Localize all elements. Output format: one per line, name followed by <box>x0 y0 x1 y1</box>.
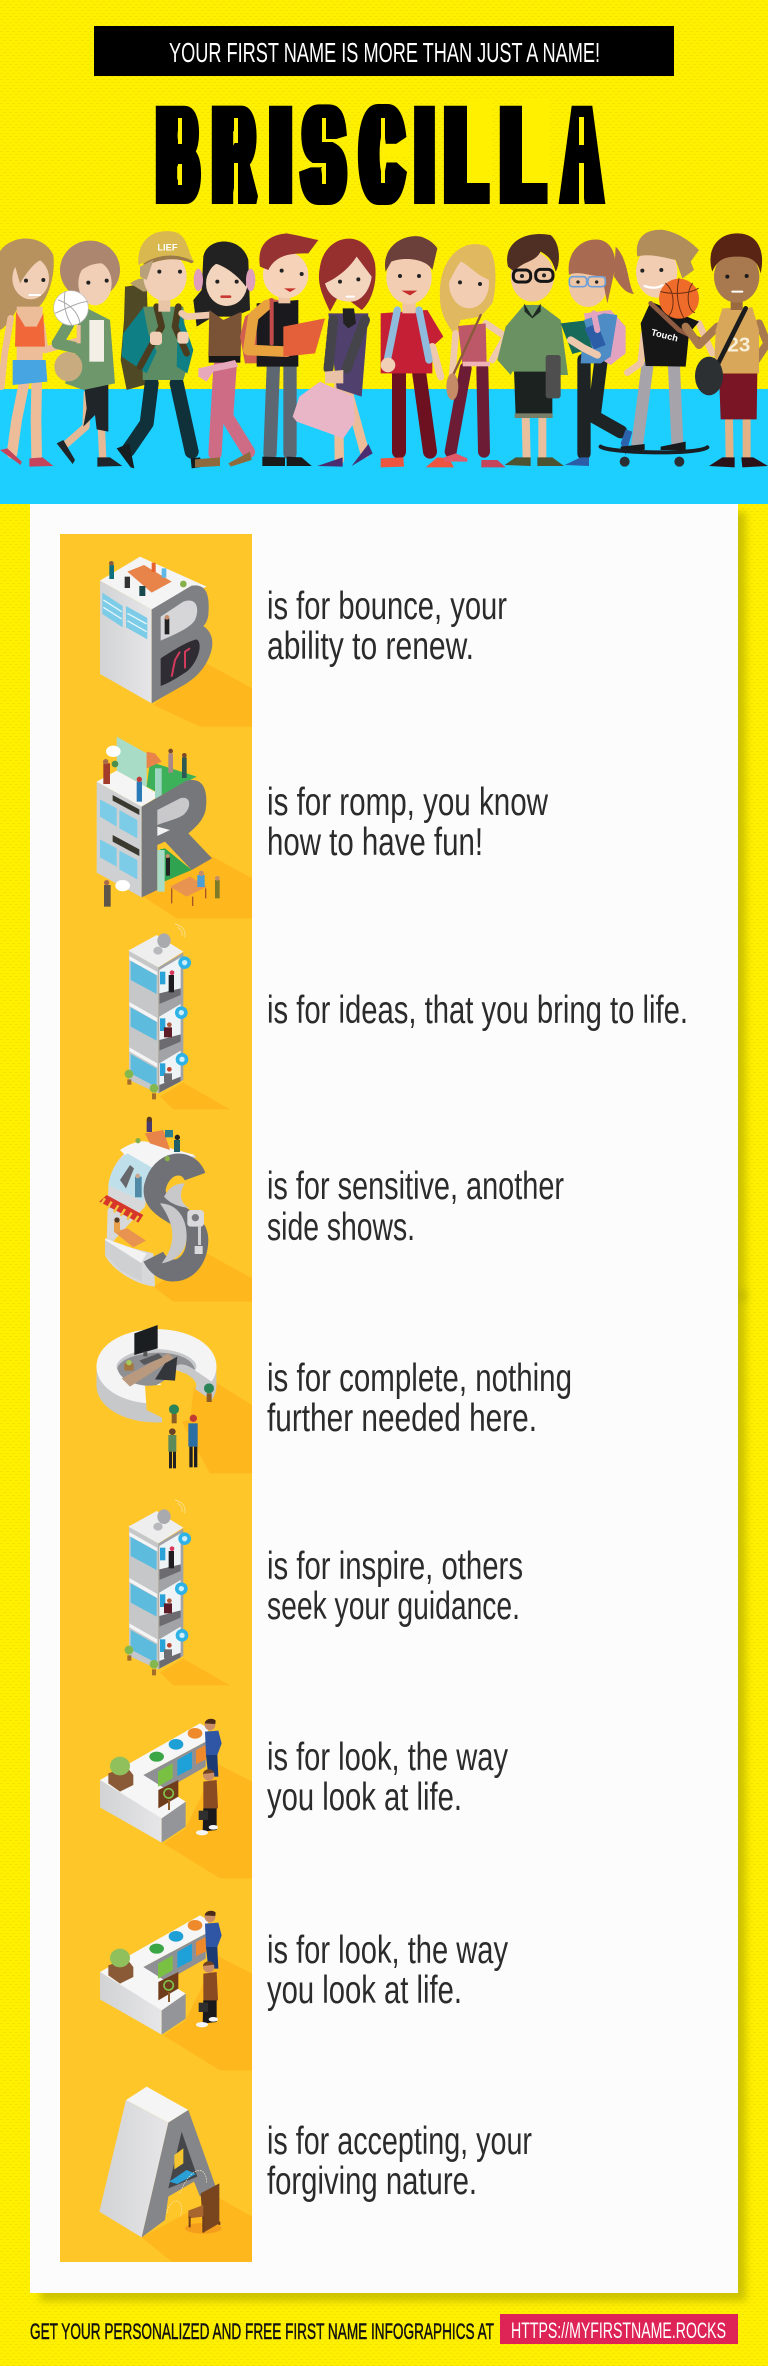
person 6 <box>293 239 376 467</box>
icon: letter B building <box>100 557 252 727</box>
footer call to action: GET YOUR PERSONALIZED AND FREE FIRST NAME INFOGRAPHICS AT <box>30 2319 494 2344</box>
text: A: is for accepting, your <box>267 2120 532 2163</box>
person 1 <box>0 239 78 467</box>
text: S <box>267 1165 564 1249</box>
text: B <box>267 585 507 668</box>
icon: letter L recycling counter <box>100 1719 252 1878</box>
text: B: is for bounce, your <box>267 585 507 628</box>
white content panel <box>30 504 746 2301</box>
person 11 <box>601 230 712 467</box>
orange illustration column <box>60 534 252 2262</box>
text: C <box>267 1357 572 1440</box>
title: C <box>363 84 401 227</box>
person 7 <box>381 236 454 467</box>
title: I <box>418 84 431 227</box>
top banner <box>94 26 674 76</box>
title: I <box>272 84 289 227</box>
person 12 <box>686 233 768 467</box>
person 3 <box>117 231 203 468</box>
icon: letter I tower (second) <box>125 1500 230 1685</box>
text: S: side shows. <box>267 1206 415 1249</box>
text: C: further needed here. <box>267 1397 537 1440</box>
person 8 <box>440 244 506 467</box>
text: R: is for romp, you know <box>267 781 549 824</box>
text: I second <box>267 1545 523 1628</box>
person 5 <box>240 233 325 466</box>
text: L: you look at life. <box>267 1776 462 1819</box>
icon: letter A building <box>99 2087 252 2262</box>
text: A: forgiving nature. <box>267 2160 477 2203</box>
text: R <box>267 781 549 864</box>
icon: letter L recycling counter (second) <box>100 1911 252 2070</box>
person 12: 23 <box>727 334 750 357</box>
text: I second: is for inspire, others <box>267 1545 523 1588</box>
person 10 <box>561 239 634 466</box>
title: B <box>159 84 196 227</box>
title: L <box>447 84 484 227</box>
title: R <box>215 84 252 227</box>
icon: letter R building <box>97 737 252 918</box>
text: I second: seek your guidance. <box>267 1585 520 1628</box>
text: L second: is for look, the way <box>267 1929 508 1972</box>
icon: letter C reception desk <box>106 1325 252 1473</box>
person 3: LIEF <box>157 243 178 253</box>
person 11: Touch <box>650 327 679 344</box>
group of people, right half <box>381 230 768 467</box>
text: L second <box>267 1929 508 2012</box>
text: B: ability to renew. <box>267 625 474 668</box>
person 4 <box>182 241 255 467</box>
text: S: is for sensitive, another <box>267 1165 564 1208</box>
person 9 <box>497 234 568 466</box>
blue floor band <box>0 389 768 504</box>
text: L second: you look at life. <box>267 1969 462 2012</box>
text: L <box>267 1736 508 1819</box>
text: R: how to have fun! <box>267 821 483 864</box>
title: L <box>503 84 542 227</box>
text: C: is for complete, nothing <box>267 1357 572 1400</box>
person 2 <box>54 241 122 467</box>
group of people, left half <box>0 231 376 468</box>
text: A <box>267 2120 532 2203</box>
text: A <box>565 84 599 227</box>
title <box>159 84 599 227</box>
title: S <box>305 84 342 227</box>
icon: letter I tower <box>125 924 230 1109</box>
icon: letter S building <box>99 1117 252 1302</box>
text: L: is for look, the way <box>267 1736 508 1779</box>
